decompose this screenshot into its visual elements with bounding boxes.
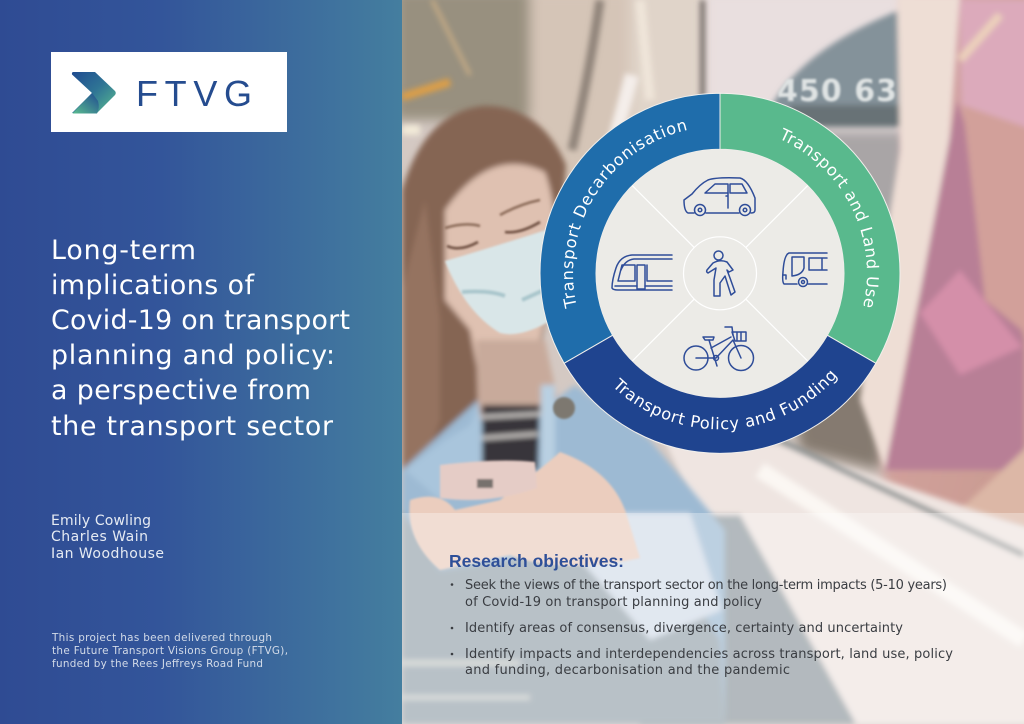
objective 1: Seek the views of the transport sector on the long-term impacts (5-10 years) <box>465 578 947 593</box>
inner dividers <box>632 186 808 361</box>
title: implications of <box>51 270 255 301</box>
research objectives list <box>451 578 953 678</box>
window sill <box>640 430 1024 724</box>
icon: FTVG chevron <box>72 72 116 114</box>
funding note: This project has been delivered through <box>51 632 272 644</box>
number on passing train: 450 63 <box>777 74 897 109</box>
objective 3 <box>451 647 953 678</box>
lower jacket and sleeve <box>402 510 725 724</box>
title: Covid-19 on transport <box>51 305 350 336</box>
circular diagram <box>540 92 900 454</box>
objective 3: Identify impacts and interdependencies across transport, land use, policy <box>465 647 953 662</box>
funding note: the Future Transport Visions Group (FTVG), <box>52 645 288 657</box>
title: a perspective from <box>51 375 311 406</box>
icon: tram <box>612 255 672 290</box>
title: the transport sector <box>51 411 334 442</box>
icon: bus <box>783 253 827 286</box>
left sidebar with gradient <box>0 0 402 724</box>
title: Long-term <box>51 235 196 266</box>
authors: Charles Wain <box>51 529 148 545</box>
icon: car <box>684 178 755 216</box>
objective 2: Identify areas of consensus, divergence, certainty and uncertainty <box>465 621 903 636</box>
label: Transport and Land Use: Transport and Land Use <box>782 128 880 308</box>
authors: Emily Cowling <box>51 513 151 529</box>
funding note <box>51 632 288 670</box>
translucent objectives panel <box>402 513 1024 724</box>
objective 1: of Covid-19 on transport planning and policy <box>465 595 762 610</box>
background photo: commuter wearing a mask on a train <box>395 0 1024 724</box>
logo panel <box>51 52 287 132</box>
ring segment: Transport and Land Use <box>720 93 900 363</box>
objective 1 <box>451 578 947 610</box>
funding note: funded by the Rees Jeffreys Road Fund <box>52 658 263 670</box>
dark train panel behind number <box>771 9 902 109</box>
woman <box>402 106 725 724</box>
icon: pedestrian <box>707 251 735 296</box>
ring segment: Transport Policy and Funding <box>564 335 876 453</box>
authors: Ian Woodhouse <box>51 546 164 562</box>
objective 3: and funding, decarbonisation and the pandemic <box>465 663 790 678</box>
research objectives heading: Research objectives: <box>449 551 624 571</box>
authors <box>51 513 164 562</box>
centre circle <box>684 237 756 310</box>
logo wordmark: FTVG <box>136 73 252 114</box>
inner disc <box>596 149 844 397</box>
label: Transport Decarbonisation: Transport Decarbonisation <box>563 122 687 309</box>
title <box>51 235 350 442</box>
ring segment: Transport Decarbonisation <box>540 93 720 363</box>
title: planning and policy: <box>51 340 335 371</box>
icon: bicycle <box>684 327 754 370</box>
label: Transport Policy and Funding: Transport Policy and Funding <box>615 370 838 432</box>
